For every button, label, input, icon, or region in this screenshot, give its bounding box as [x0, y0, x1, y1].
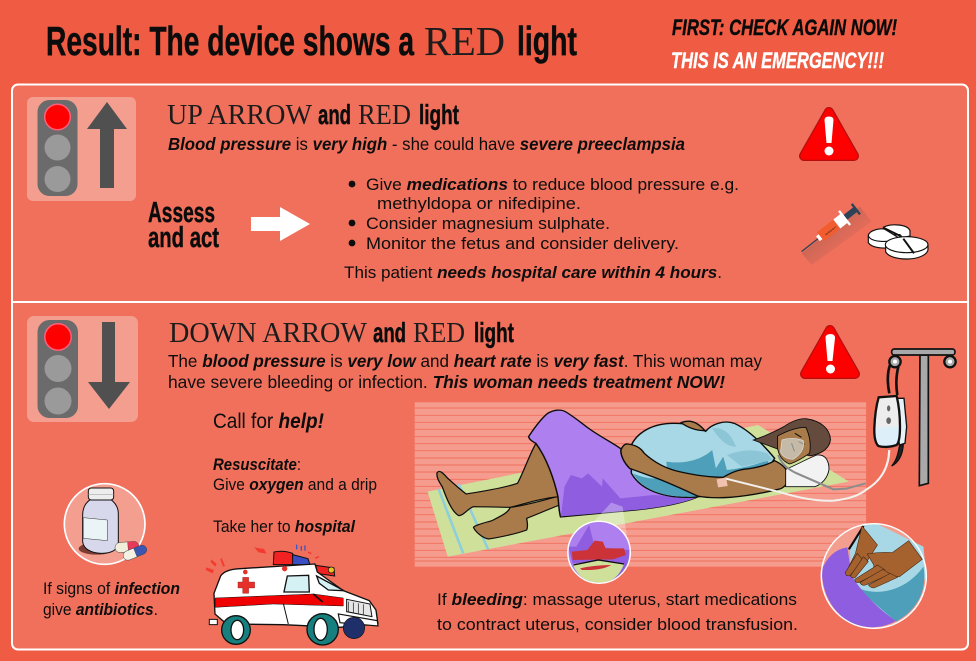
- text: needs hospital care: This patient needs hospital care within 4 hours.: [344, 263, 722, 282]
- callout: check again: FIRST: CHECK AGAIN NOW!: [672, 15, 897, 40]
- title: Result: The device shows a: [46, 18, 415, 64]
- text: infection antibiotics: [43, 579, 180, 619]
- heading: down arrow and red light: light: [474, 317, 514, 348]
- text: blood pressure very high: Blood pressure is very high - she could have severe preeclampsia: [168, 134, 685, 154]
- heading: up arrow and red light: RED: [358, 100, 411, 131]
- icon: ambulance: [206, 545, 378, 645]
- text: resuscitate: Resuscitate:: [213, 455, 301, 474]
- icon: traffic light with up arrow: [27, 97, 136, 201]
- text: resuscitate: Give oxygen and a drip: [213, 475, 377, 494]
- text: call for help: Call for help!: [213, 410, 324, 433]
- text: low blood pressure description: The blood pressure is very low and heart rate is very fast. This woman may: [168, 351, 762, 371]
- heading: assess and act: and act: [148, 222, 219, 254]
- text: resuscitate: [213, 455, 377, 494]
- heading: up arrow and red light: and: [318, 99, 351, 130]
- heading: assess and act: Assess: [148, 197, 215, 229]
- icon: warning triangle: [805, 330, 855, 374]
- heading: down arrow and red light: DOWN ARROW: [169, 318, 368, 349]
- arms and hands: [621, 421, 789, 498]
- icon: syringe and tablets: [796, 201, 928, 265]
- inset: uterine massage: [821, 524, 926, 628]
- panel: up arrow section: [27, 97, 928, 282]
- list: actions: Monitor the fetus and consider delivery.: [366, 234, 679, 253]
- inset: bleeding: [568, 503, 630, 583]
- title: RED: [424, 18, 505, 64]
- heading: up arrow and red light: UP ARROW: [167, 100, 313, 131]
- pillow: [786, 455, 829, 487]
- text: infection antibiotics: give antibiotics.: [43, 600, 158, 619]
- icon: antibiotics bottle and capsules: [64, 484, 148, 564]
- list: actions: methyldopa or nifedipine.: [377, 194, 581, 213]
- icon: warning triangle: [804, 112, 854, 156]
- figure: woman lying on mat with oxygen and drip: [415, 402, 926, 628]
- text: low blood pressure description: have severe bleeding or infection. This woman needs treatment NOW!: [168, 372, 725, 392]
- text: take her to hospital: Take her to hospital: [213, 517, 356, 536]
- head: [753, 419, 830, 464]
- list: actions: Consider magnesium sulphate.: [366, 214, 610, 233]
- heading: down arrow and red light: RED: [413, 318, 465, 349]
- text: bleeding instructions: If bleeding: massage uterus, start medications: [437, 590, 797, 609]
- legs: [437, 443, 560, 539]
- text: infection antibiotics: If signs of infection: [43, 579, 180, 598]
- list: actions: Give medications to reduce blood pressure e.g.: [366, 175, 739, 194]
- blanket: [529, 410, 697, 517]
- panel: down arrow section: [27, 316, 956, 645]
- heading: assess and act: [148, 197, 219, 254]
- heading: down arrow and red light: [169, 317, 514, 349]
- list: actions: [349, 175, 739, 253]
- callout: check again: THIS IS AN EMERGENCY!!!: [671, 48, 884, 73]
- callout: check again: [671, 15, 897, 73]
- text: low blood pressure description: [168, 351, 762, 392]
- heading: up arrow and red light: [167, 99, 459, 131]
- text: bleeding instructions: to contract uterus, consider blood transfusion.: [437, 615, 798, 634]
- heading: down arrow and red light: and: [373, 317, 406, 348]
- heading: up arrow and red light: light: [419, 99, 459, 130]
- mat: [428, 425, 849, 557]
- text: bleeding instructions: [437, 590, 798, 634]
- title: light: [517, 18, 577, 64]
- background stripes: [415, 402, 866, 567]
- icon: traffic light with down arrow: [27, 316, 138, 422]
- arrow: assess to actions: [251, 207, 310, 241]
- oxygen tube and drip line: [726, 450, 889, 501]
- icon: IV stand and drip bag: [874, 349, 956, 486]
- body in gown: [631, 422, 775, 497]
- tape on arm: [717, 477, 728, 487]
